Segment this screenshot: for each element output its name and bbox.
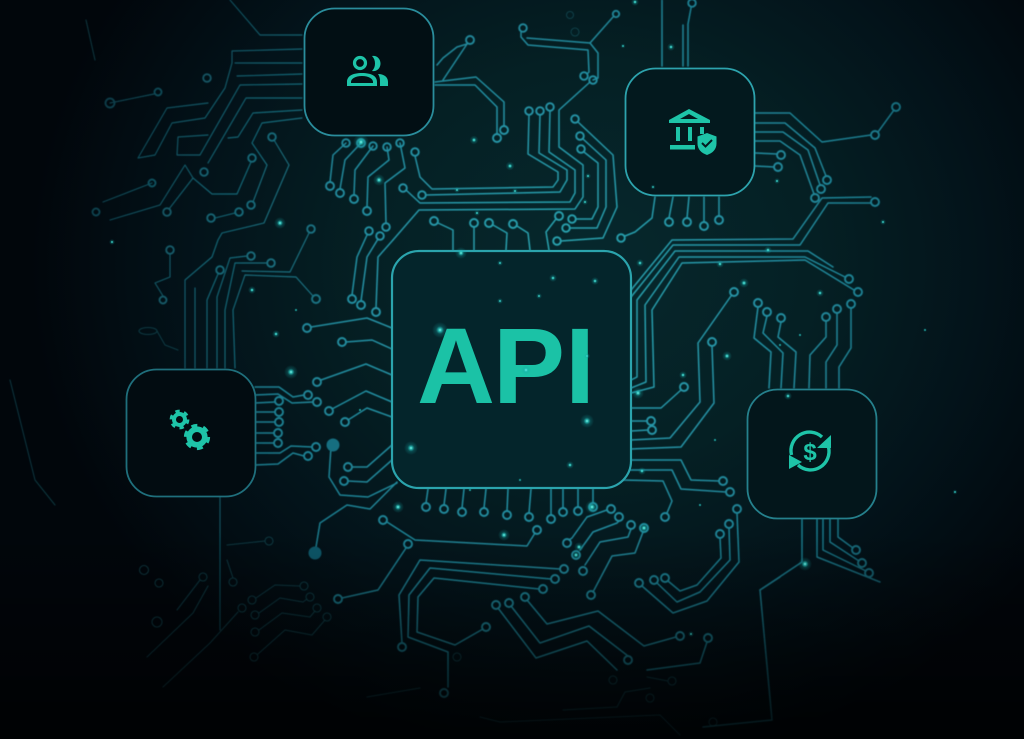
chip: API xyxy=(392,251,631,488)
chip: gears xyxy=(126,370,256,496)
icon: users xyxy=(347,56,388,86)
chip: bank xyxy=(626,68,754,196)
traces: API chip right side xyxy=(563,288,738,599)
chip: currency exchange xyxy=(748,390,876,518)
icon: dollar exchange: $ xyxy=(803,439,817,466)
icon: bank with shield xyxy=(669,109,716,155)
API label: I xyxy=(565,305,595,426)
API label: A xyxy=(417,305,495,426)
traces: bank chip xyxy=(617,103,900,393)
icon: gears xyxy=(171,411,208,448)
traces: lower centre xyxy=(334,505,780,697)
glowing sparkles xyxy=(109,0,958,637)
traces: API chip top and bottom pins xyxy=(422,212,597,523)
traces: users chip xyxy=(326,0,696,245)
traces: gear chip right and API chip left xyxy=(255,227,397,559)
chip: users xyxy=(304,8,434,136)
traces: upper left xyxy=(92,0,320,630)
traces: dollar chip xyxy=(703,299,880,727)
API label: P xyxy=(493,305,565,426)
faint traces: lower left and bottom xyxy=(10,12,717,735)
